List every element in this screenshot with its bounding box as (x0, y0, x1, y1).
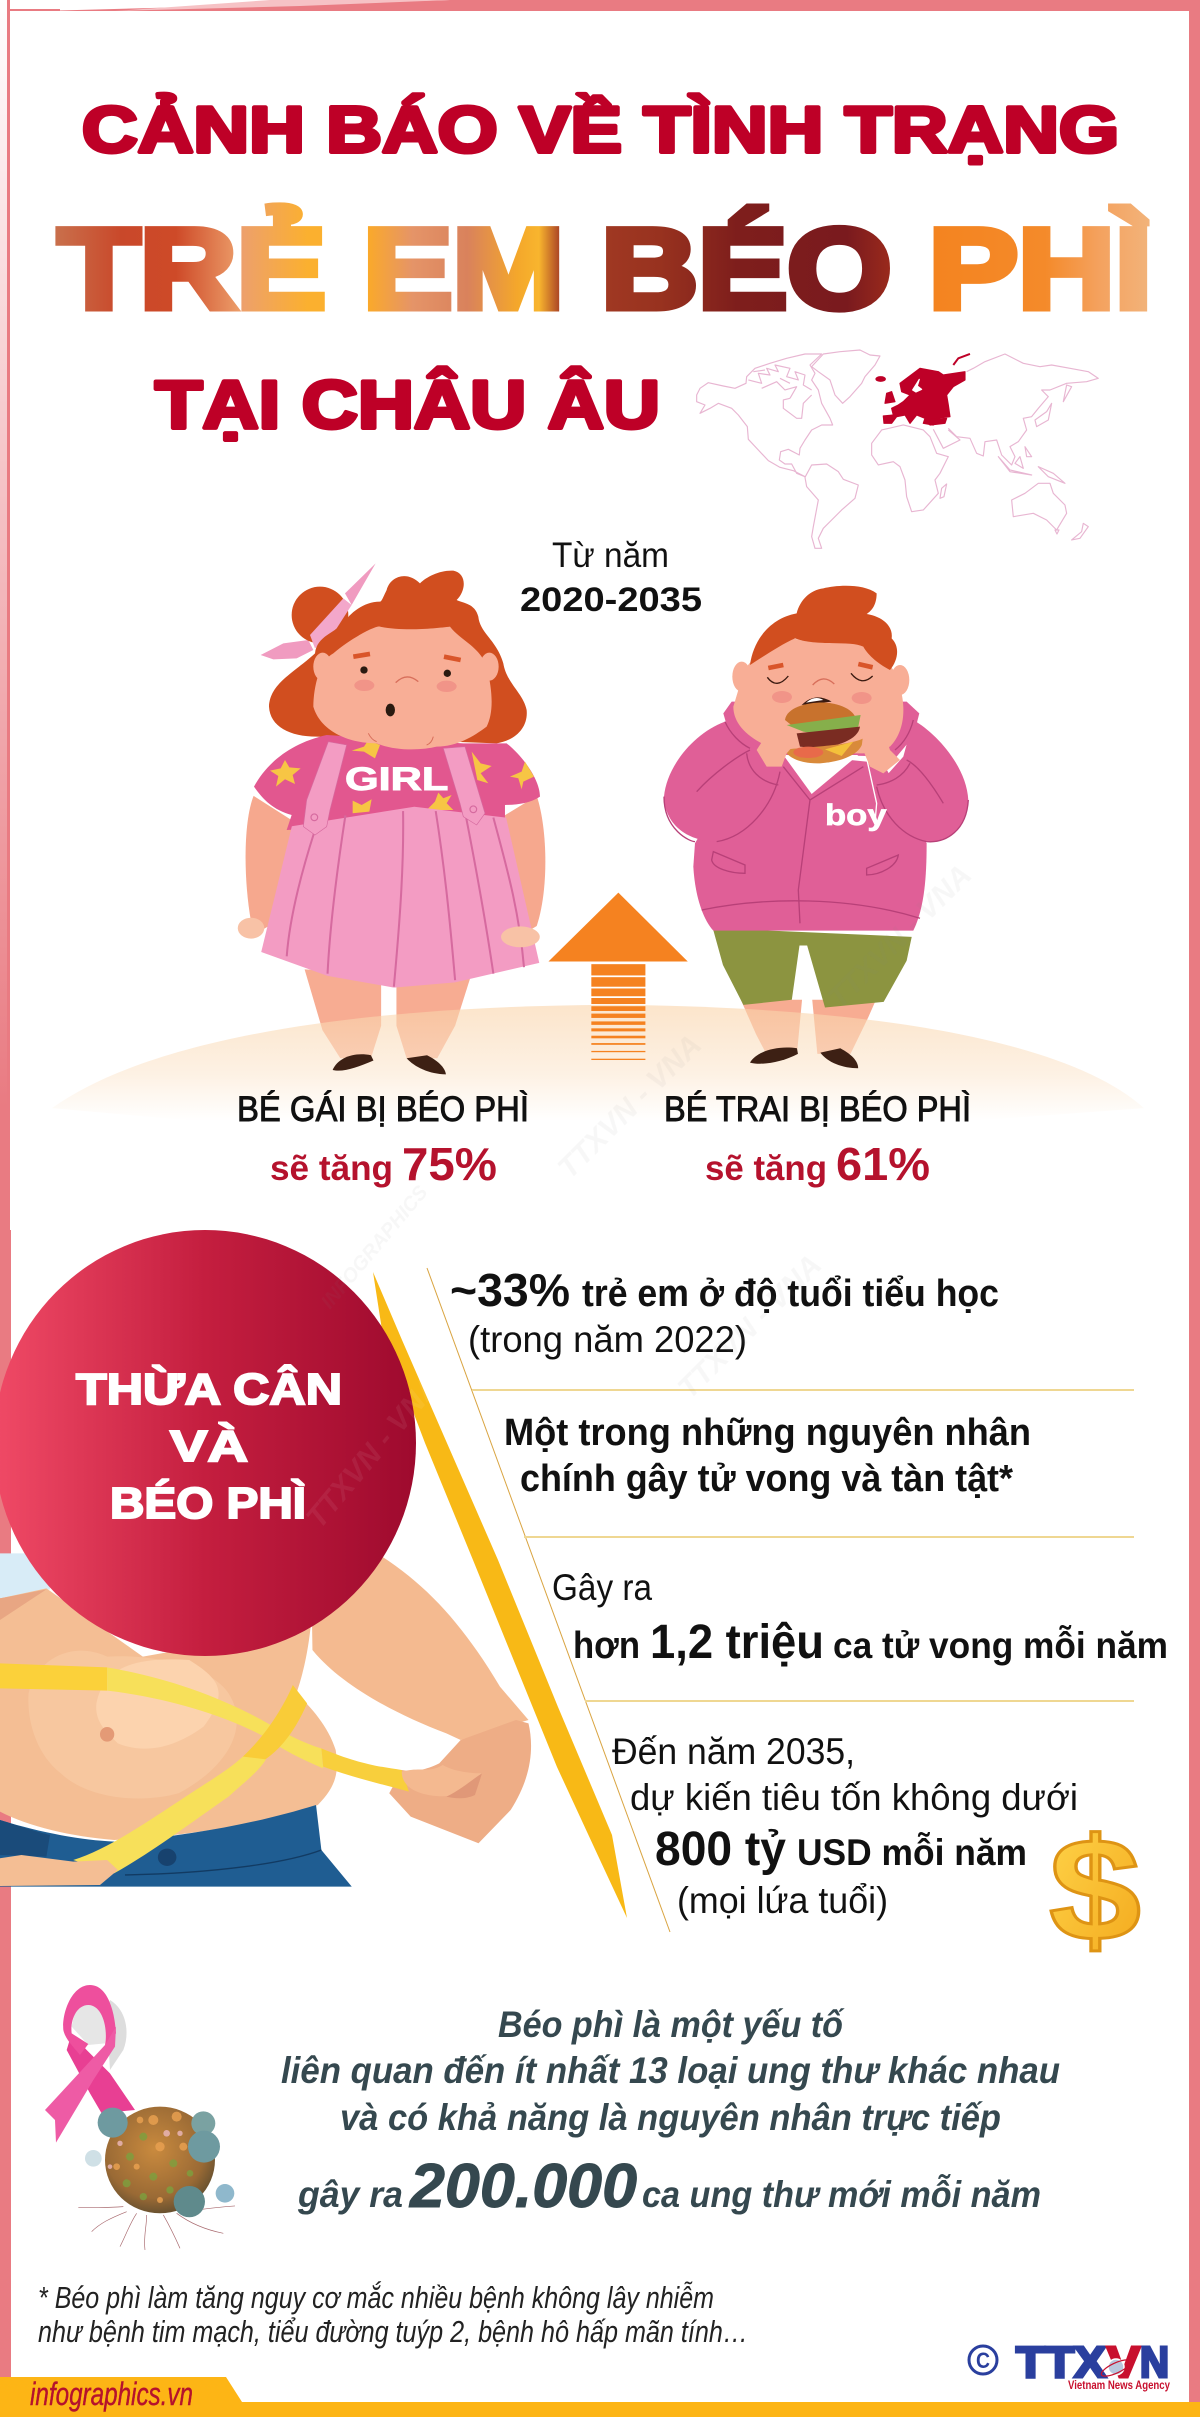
label: boys: 61% (836, 1138, 930, 1190)
footnote (38, 2280, 748, 2349)
circle badge (0, 1230, 416, 1656)
label: girls: sẽ tăng (270, 1149, 393, 1188)
fact: 1.2 million (552, 1567, 1168, 1669)
label: girls: BÉ GÁI BỊ BÉO PHÌ (237, 1090, 529, 1129)
watermarks: TTXVN - VNA (552, 1028, 708, 1185)
logo: TTXVN: N (1140, 2338, 1169, 2387)
fact: 800 billion: dự kiến tiêu tốn không dưới (630, 1777, 1078, 1818)
watermarks: INFOGRAPHICS (317, 1181, 433, 1313)
cancer statement: Béo phì là một yếu tố (498, 2004, 845, 2045)
cancer statement: 200.000 (409, 2152, 637, 2221)
label: boys (664, 1090, 971, 1190)
measuring tape (0, 1663, 409, 1873)
shoes (333, 1048, 858, 1074)
fact: 33 percent: trẻ em ở độ tuổi tiểu học (582, 1273, 999, 1315)
footnote: * Béo phì làm tăng nguy cơ mắc nhiều bệnh không lây nhiễm (38, 2280, 714, 2315)
watermarks: TTXVN - VNA (672, 1248, 828, 1405)
fact: cause of death: chính gây tử vong và tàn tật* (520, 1458, 1013, 1500)
cancer statement: gây ra (297, 2174, 403, 2215)
from-year label: Từ năm (552, 536, 669, 575)
title line 3: TẠI CHÂU ÂU (155, 366, 660, 443)
fact: 33 percent: ~33% (450, 1264, 570, 1316)
icon: boy (664, 586, 968, 1054)
fact: 800 billion: 800 tỷ (655, 1823, 786, 1876)
footer bar (0, 2376, 1200, 2417)
fact: 1.2 million: ca tử vong mỗi năm (833, 1625, 1168, 1666)
icon: boy: boy (825, 799, 887, 832)
title line 2: TRẺ EM BÉO PHÌ (58, 206, 1152, 333)
logo: TTXVN: TTX (1016, 2338, 1106, 2387)
fact: 33 percent (450, 1264, 999, 1360)
arrow: upward increase (548, 893, 688, 1060)
cancer statement (281, 2004, 1060, 2221)
circle badge: VÀ (170, 1421, 248, 1471)
title line 1: CẢNH BÁO VỀ TÌNH TRẠNG (82, 93, 1119, 166)
icon: girl: GIRL (345, 760, 448, 797)
logo: TTXVN: Vietnam News Agency (1068, 2378, 1170, 2392)
icon: girl (238, 563, 545, 1058)
logo: TTXVN (969, 2338, 1170, 2392)
footnote: như bệnh tim mạch, tiểu đường tuýp 2, bệnh hô hấp mãn tính… (38, 2314, 748, 2349)
fact: 33 percent: (trong năm 2022) (468, 1319, 747, 1360)
circle badge: BÉO PHÌ (110, 1478, 306, 1528)
label: boys: BÉ TRAI BỊ BÉO PHÌ (664, 1090, 971, 1129)
fact: cause of death: Một trong những nguyên nhân (504, 1412, 1031, 1454)
watermarks: TTXVN - VNA (822, 858, 978, 1015)
cancer statement: ca ung thư mới mỗi năm (642, 2174, 1041, 2215)
cancer statement: liên quan đến ít nhất 13 loại ung thư khác nhau (281, 2050, 1060, 2091)
fact: 800 billion (612, 1731, 1078, 1921)
from-year label: 2020-2035 (520, 581, 702, 619)
logo: TTXVN: V (1107, 2338, 1141, 2387)
circle badge: THỪA CÂN (76, 1364, 342, 1414)
logo: TTXVN: C (976, 2348, 990, 2373)
fact: 1.2 million: 1,2 triệu (650, 1616, 824, 1669)
icon: pink ribbon and cancer cell (45, 1985, 235, 2250)
label: boys: sẽ tăng (705, 1149, 827, 1188)
watermarks (300, 858, 978, 1534)
fact: 1.2 million: Gây ra (552, 1567, 652, 1608)
footer bar: infographics.vn (30, 2376, 193, 2412)
world map with Europe highlighted (697, 350, 1098, 548)
fact: cause of death (504, 1412, 1031, 1500)
fact: 1.2 million: hơn (573, 1625, 640, 1667)
ground (52, 893, 1144, 1121)
icon: dollar sign: $ (1049, 1808, 1141, 1971)
fact: 800 billion: Đến năm 2035, (612, 1731, 855, 1772)
from-year label (520, 536, 702, 619)
cancer statement: và có khả năng là nguyên nhân trực tiếp (340, 2097, 1001, 2138)
illustration: children on ground (52, 563, 1144, 1121)
panel: belly illustration (0, 1540, 531, 1887)
decorative yellow wedge (373, 1272, 627, 1918)
fact: 800 billion: (mọi lứa tuổi) (677, 1880, 888, 1921)
fact: 800 billion: USD mỗi năm (797, 1832, 1027, 1873)
label: girls (237, 1090, 529, 1190)
watermarks: TTXVN - VNA (300, 1369, 446, 1534)
icon: burger (785, 703, 863, 763)
label: girls: 75% (402, 1138, 497, 1190)
